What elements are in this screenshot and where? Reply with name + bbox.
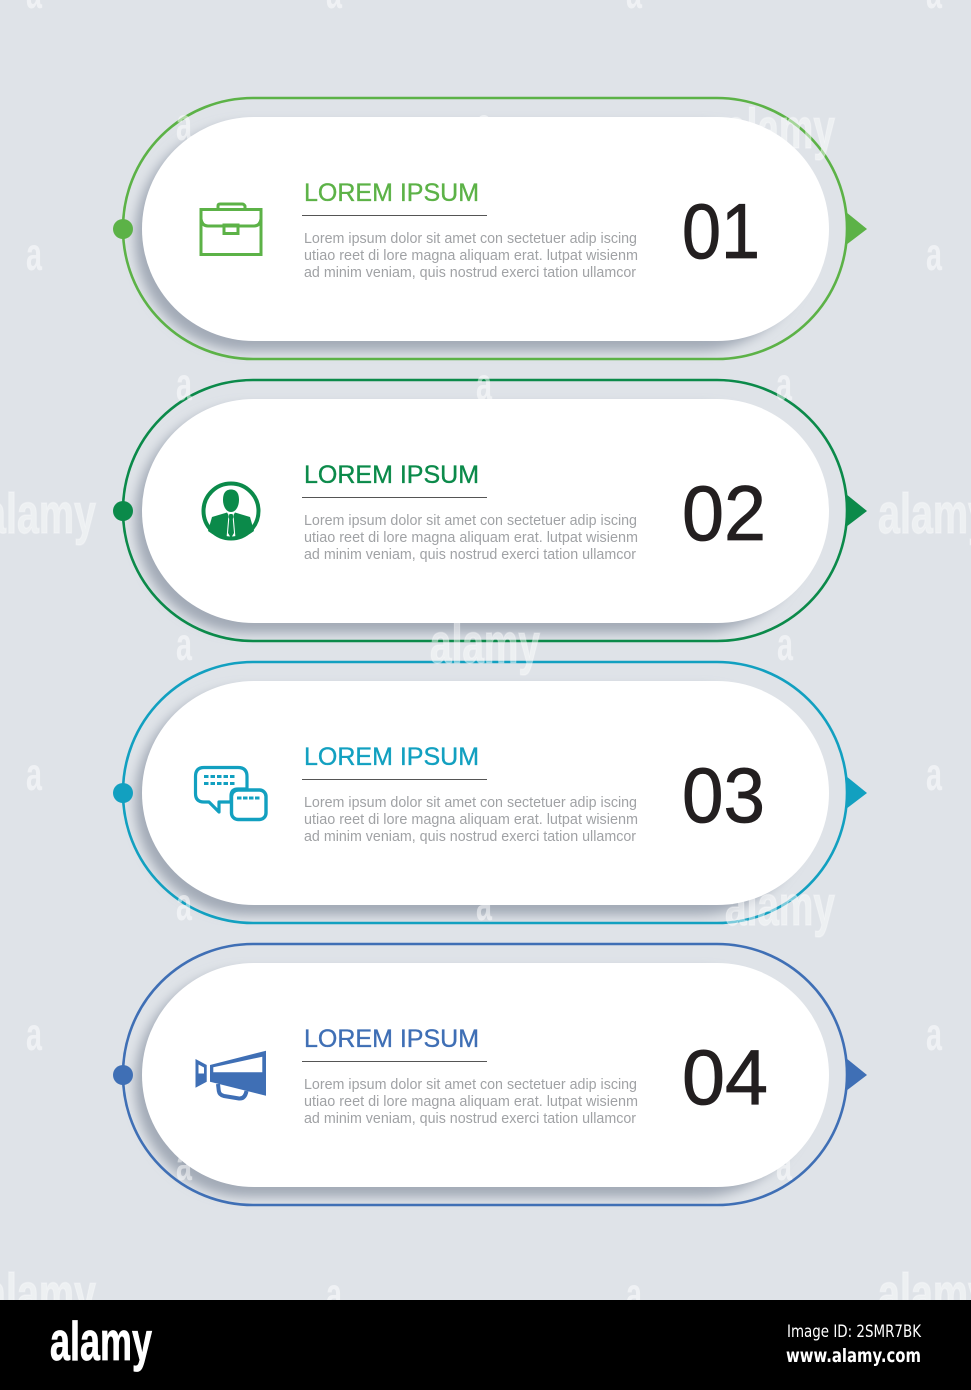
body text xyxy=(304,513,638,563)
body text: ad minim veniam, quis nostrud exerci tation ullamcor xyxy=(304,265,636,281)
watermarks: a xyxy=(26,228,42,280)
watermarks: a xyxy=(476,358,492,410)
watermarks: a xyxy=(626,1268,642,1320)
watermarks: a xyxy=(476,98,492,150)
heading: LOREM IPSUM xyxy=(304,1025,479,1053)
body text: utiao reet di lore magna aliquam erat. lutpat wisienm xyxy=(304,1094,638,1110)
divider xyxy=(302,779,487,780)
watermarks: a xyxy=(176,1138,192,1190)
white card xyxy=(142,399,829,623)
watermarks: a xyxy=(926,748,942,800)
number: 04 xyxy=(682,1033,768,1121)
body text: Lorem ipsum dolor sit amet con sectetuer adip iscing xyxy=(304,513,637,529)
body text xyxy=(304,1077,638,1127)
body text: utiao reet di lore magna aliquam erat. lutpat wisienm xyxy=(304,530,638,546)
pill shadow xyxy=(135,406,810,633)
panel: step 03 xyxy=(113,662,867,923)
start dot xyxy=(113,219,133,239)
watermarks: a xyxy=(176,98,192,150)
watermarks: alamy xyxy=(725,874,835,938)
watermarks: a xyxy=(777,618,793,670)
watermarks: a xyxy=(776,1138,792,1190)
heading: LOREM IPSUM xyxy=(304,179,479,207)
icon: megaphone xyxy=(196,1051,266,1099)
watermarks: a xyxy=(326,1268,342,1320)
arrow xyxy=(846,212,867,245)
number: 01 xyxy=(682,187,760,275)
number: 02 xyxy=(682,469,766,557)
divider xyxy=(302,1061,487,1062)
pill shadow xyxy=(135,688,810,915)
panel: step 02 xyxy=(113,380,867,641)
body text: Lorem ipsum dolor sit amet con sectetuer adip iscing xyxy=(304,795,637,811)
icon: briefcase xyxy=(201,204,261,254)
start dot xyxy=(113,501,133,521)
arrow xyxy=(846,494,867,527)
start dot xyxy=(113,1065,133,1085)
footer logo: alamy xyxy=(50,1310,152,1372)
white card xyxy=(142,117,829,341)
body text xyxy=(304,231,638,281)
outer outline xyxy=(123,944,847,1205)
outer outline xyxy=(123,98,847,359)
body text: Lorem ipsum dolor sit amet con sectetuer adip iscing xyxy=(304,1077,637,1093)
watermarks: alamy xyxy=(725,97,835,161)
watermarks: alamy xyxy=(430,612,540,676)
number: 03 xyxy=(682,751,765,839)
body text: utiao reet di lore magna aliquam erat. lutpat wisienm xyxy=(304,248,638,264)
footer bar xyxy=(0,1300,971,1390)
watermarks: a xyxy=(26,748,42,800)
watermarks: a xyxy=(176,618,192,670)
heading: LOREM IPSUM xyxy=(304,743,479,771)
divider xyxy=(302,497,487,498)
image id: Image ID: 2SMR7BK xyxy=(787,1322,922,1342)
watermarks: a xyxy=(476,1138,492,1190)
pill shadow xyxy=(135,124,810,351)
body text: ad minim veniam, quis nostrud exerci tation ullamcor xyxy=(304,547,636,563)
watermarks: a xyxy=(776,358,792,410)
icon: chat bubbles xyxy=(196,768,266,820)
body text: utiao reet di lore magna aliquam erat. lutpat wisienm xyxy=(304,812,638,828)
arrow xyxy=(846,1058,867,1091)
icon: businessman xyxy=(204,484,258,538)
start dot xyxy=(113,783,133,803)
watermarks: a xyxy=(926,1008,942,1060)
outer outline xyxy=(123,662,847,923)
watermarks: a xyxy=(926,228,942,280)
watermarks: a xyxy=(176,878,192,930)
arrow xyxy=(846,776,867,809)
body text: Lorem ipsum dolor sit amet con sectetuer adip iscing xyxy=(304,231,637,247)
white card xyxy=(142,963,829,1187)
pill shadow xyxy=(135,970,810,1197)
watermarks: a xyxy=(476,878,492,930)
panel: step 04 xyxy=(113,944,867,1205)
body text: ad minim veniam, quis nostrud exerci tation ullamcor xyxy=(304,1111,636,1127)
outer outline xyxy=(123,380,847,641)
body text xyxy=(304,795,638,845)
panel: step 01 xyxy=(113,98,867,359)
divider xyxy=(302,215,487,216)
white card xyxy=(142,681,829,905)
watermarks: a xyxy=(176,358,192,410)
body text: ad minim veniam, quis nostrud exerci tation ullamcor xyxy=(304,829,636,845)
watermarks: a xyxy=(26,1008,42,1060)
heading: LOREM IPSUM xyxy=(304,461,479,489)
website: www.alamy.com xyxy=(786,1345,921,1367)
